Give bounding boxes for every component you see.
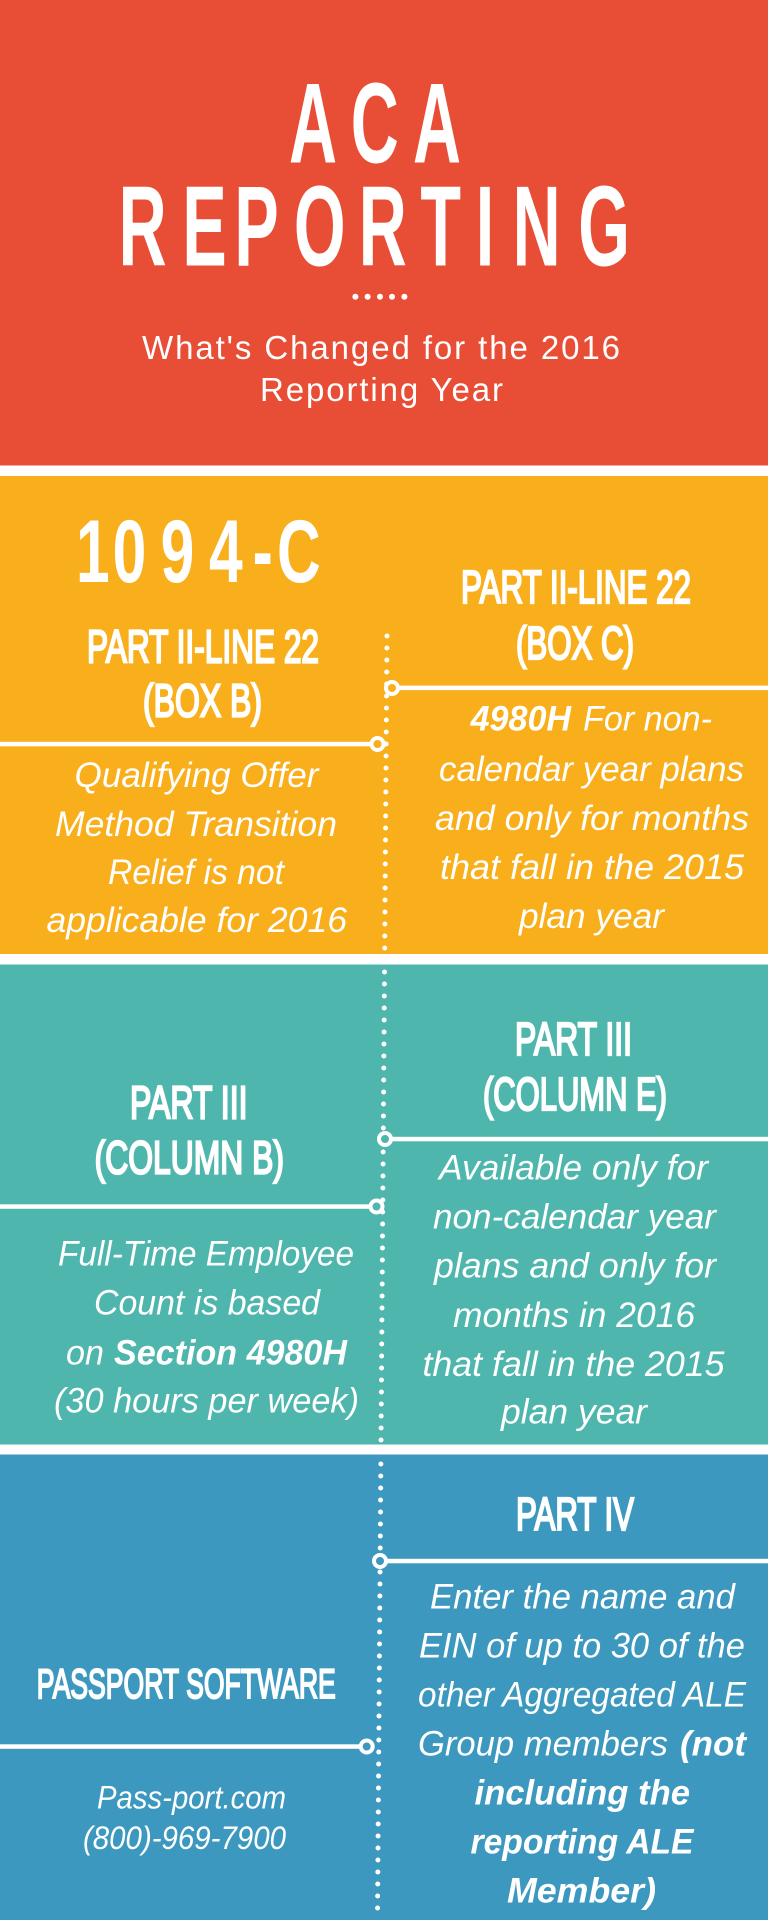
marker: Column B [370,1200,382,1212]
text: Column E description: that fall in the 2015 [422,1345,725,1384]
text: Part IV description: other Aggregated ALE [418,1676,747,1714]
panel: Part IV and contact [0,1454,768,1920]
text: Column E description: plans and only for [433,1246,717,1286]
text: Part IV description: reporting ALE [470,1822,695,1862]
text: contact details: (800)-969-7900 [83,1820,286,1856]
text: Part IV description: Group members [418,1724,668,1764]
text: Part IV description: (not [680,1724,747,1764]
subtitle: What's Changed for the 2016 [142,329,620,366]
text: Box B description: applicable for 2016 [46,901,348,940]
text: Column B description: Full-Time Employee [58,1235,354,1274]
title [119,58,630,290]
heading: 1094-C: 1094-C [76,502,321,602]
text: Box B description: Relief is not [108,853,285,892]
dotted timeline connector [378,636,387,1916]
text: Box C description: plan year [518,897,665,936]
text: Box C description: and only for months [435,799,749,838]
marker: Box B [372,738,384,750]
subtitle [142,329,620,408]
text: Part IV description: including the [474,1774,690,1812]
heading: Box B: (BOX B) [143,674,262,726]
title: REPORTING [119,161,630,290]
marker: Part IV [374,1555,386,1567]
text: Column E description: Available only for [437,1149,709,1188]
heading: Column B: PART III [130,1077,248,1129]
text: Column B description: on [66,1334,104,1372]
marker: Column E [379,1133,391,1145]
text: Part IV description: EIN of up to 30 of the [419,1627,745,1666]
text: Part IV description: Enter the name and [430,1578,737,1617]
title: ACA [289,58,461,187]
panel: 1094-C Part II Line 22 [0,476,768,954]
heading: Passport Software: PASSPORT SOFTWARE [37,1660,336,1707]
dots divider [352,294,407,300]
text: Column E description: months in 2016 [453,1296,696,1335]
text: Part IV description: Member) [507,1871,656,1910]
marker: Passport Software [361,1740,373,1752]
marker: Box C [386,682,398,694]
heading: Box B [87,621,319,726]
subtitle: Reporting Year [260,371,503,408]
text: Column E description: plan year [500,1393,648,1432]
panel: Part III [0,964,768,1444]
heading: Box B: PART II-LINE 22 [87,621,319,673]
heading: Part IV: PART IV [516,1488,634,1540]
text: contact details: Pass-port.com [97,1780,286,1816]
text: Column B description: Section 4980H [114,1334,348,1372]
text: Box B description [46,756,348,940]
text: Column B description: Count is based [94,1284,321,1323]
heading: Box C: (BOX C) [516,617,634,669]
text: contact details [83,1780,286,1856]
text: Box C description: that fall in the 2015 [440,848,745,887]
heading: Column E [483,1013,667,1120]
text: Box B description: Qualifying Offer [74,756,320,795]
text: Part IV description [418,1578,747,1910]
text: Column B description [54,1235,359,1421]
text: Column E description [422,1149,725,1432]
text: Column E description: non-calendar year [433,1198,717,1237]
heading: Box C [461,561,691,669]
text: Column B description: (30 hours per week) [54,1382,359,1421]
text: Box C description: For non- [583,700,712,739]
heading: Column E: (COLUMN E) [483,1068,667,1120]
text: Box C description: 4980H [470,700,572,739]
heading: Column B: (COLUMN B) [95,1132,284,1184]
panel: header [0,0,768,466]
heading: Column B [95,1077,284,1184]
text: Box C description [435,700,749,936]
text: Box C description: calendar year plans [439,750,744,789]
heading: Column E: PART III [515,1013,632,1065]
text: Box B description: Method Transition [55,805,337,844]
